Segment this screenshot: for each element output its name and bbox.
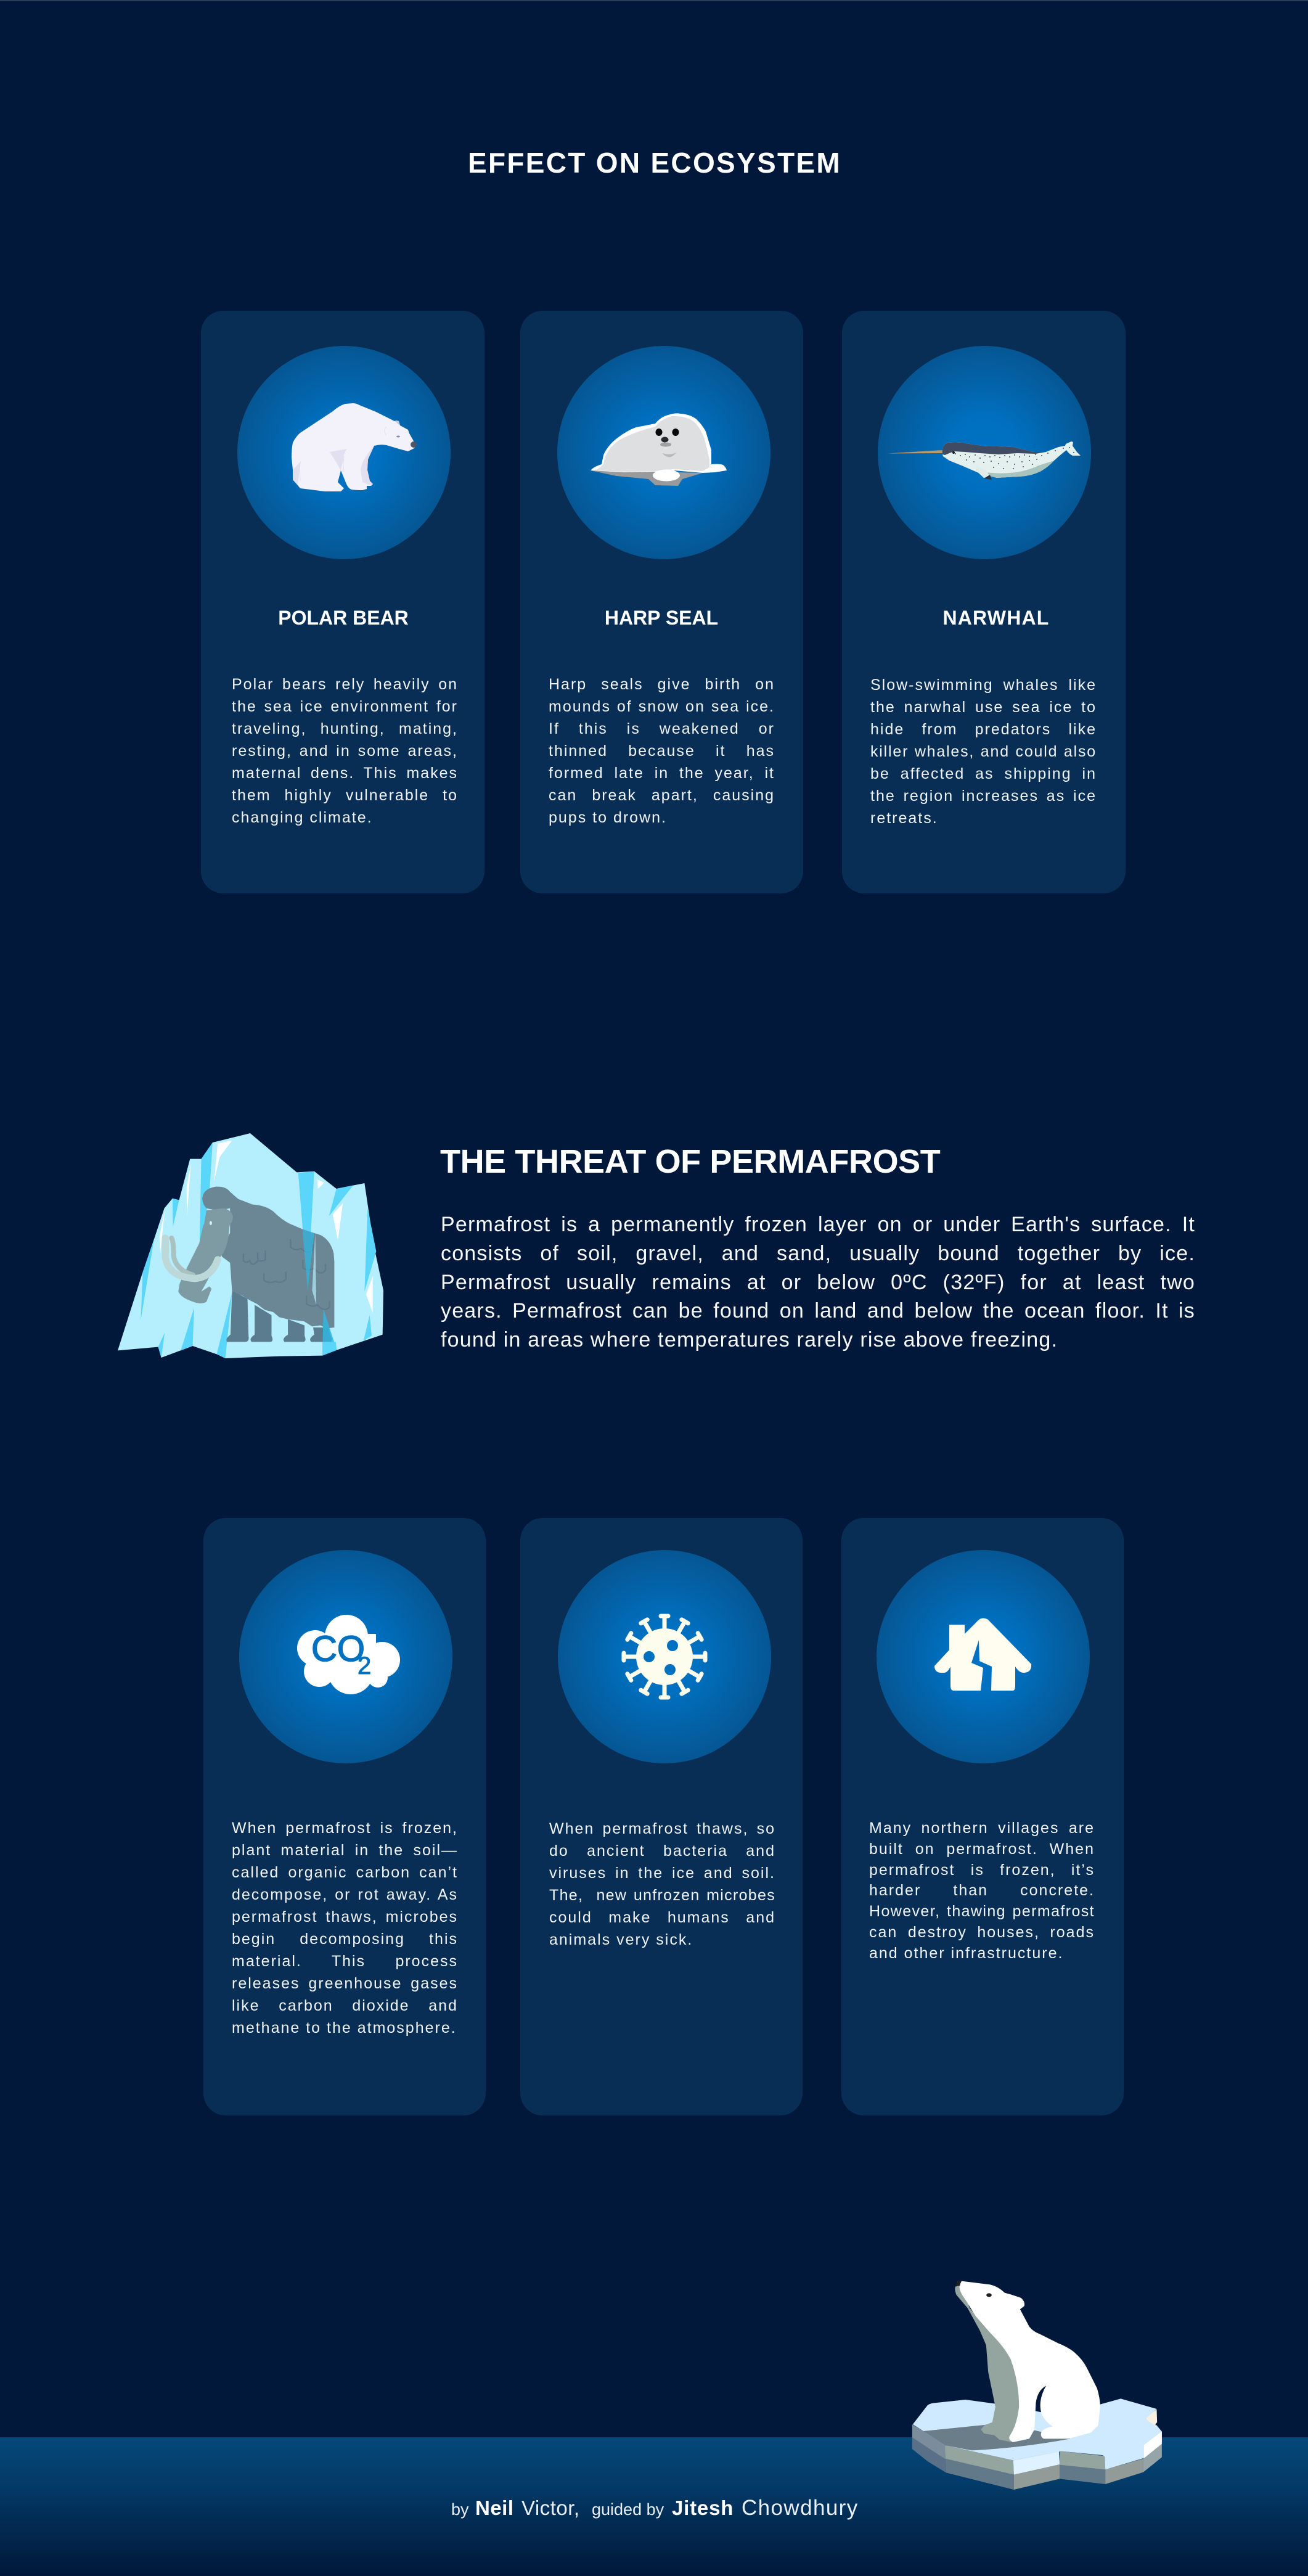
text: polar bear: resting, and in some areas,	[232, 742, 458, 760]
icon circle: polar bear	[237, 346, 451, 559]
text: carbon release: plant material in the soil—	[232, 1842, 458, 1859]
text: harp seal: If this is weakened or	[549, 720, 775, 737]
title: EFFECT ON ECOSYSTEM	[468, 147, 841, 179]
text: narwhal: hide from predators like	[870, 721, 1097, 738]
text: narwhal: the narwhal use sea ice to	[870, 699, 1097, 716]
text: narwhal: killer whales, and could also	[870, 743, 1097, 760]
text: harp seal: Harp seals give birth on	[549, 676, 775, 693]
text: narwhal: be affected as shipping in	[870, 765, 1097, 782]
mammoth trunk	[178, 1224, 230, 1303]
fur marks	[243, 1239, 330, 1310]
text: permafrost description: years. Permafrost can be found on land and below the ocean floor. It is	[441, 1299, 1195, 1323]
mammoth legs	[226, 1290, 332, 1342]
icon circle: CO2 cloud	[239, 1550, 452, 1763]
text: infrastructure damage: can destroy houses, roads	[869, 1924, 1095, 1941]
text: infrastructure damage	[869, 1819, 1095, 1962]
mammoth head	[199, 1208, 233, 1258]
text: carbon release: releases greenhouse gases	[232, 1975, 458, 1992]
text: polar bear: maternal dens. This makes	[232, 765, 458, 782]
icon circle: CO2 cloud: 2	[358, 1652, 371, 1680]
text: harp seal: thinned because it has	[549, 742, 775, 760]
text: narwhal: the region increases as ice	[870, 787, 1097, 805]
panel: harp seal	[520, 311, 803, 893]
text: carbon release: called organic carbon can’t	[232, 1864, 458, 1881]
text: polar bear: the sea ice environment for	[232, 698, 458, 715]
illustration: polar bear on ice floe	[912, 2280, 1162, 2490]
panel: carbon release	[203, 1518, 486, 2115]
text: permafrost description: found in areas where temperatures rarely rise above freezing.	[441, 1328, 1058, 1352]
text: carbon release: decompose, or rot away. As	[232, 1886, 458, 1903]
text: harp seal: formed late in the year, it	[549, 765, 775, 782]
text: carbon release: methane to the atmosphere.	[232, 2019, 457, 2037]
text: polar bear	[232, 676, 458, 826]
mammoth body	[202, 1187, 334, 1329]
text: permafrost description	[441, 1213, 1195, 1352]
text: polar bear: changing climate.	[232, 809, 373, 826]
text: infrastructure damage: and other infrastructure.	[869, 1945, 1063, 1962]
text: harp seal: mounds of snow on sea ice.	[549, 698, 775, 715]
text: polar bear: Polar bears rely heavily on	[232, 676, 458, 693]
bear nose and eye	[955, 2281, 961, 2287]
text: ancient microbes: The, new unfrozen microbes	[549, 1887, 775, 1904]
heading: polar bear: POLAR BEAR	[278, 607, 409, 629]
icon circle: harp seal	[557, 346, 770, 559]
icon circle: narwhal	[878, 346, 1091, 559]
text: infrastructure damage: built on permafrost. When	[869, 1840, 1095, 1858]
bear body	[959, 2281, 1100, 2442]
footer credits: Neil	[475, 2496, 514, 2519]
text: narwhal: retreats.	[870, 810, 938, 827]
footer water band	[0, 2437, 1308, 2576]
heading: harp seal: HARP SEAL	[605, 607, 718, 629]
text: permafrost description: Permafrost is a permanently frozen layer on or under Earth's surface. It	[441, 1213, 1195, 1236]
text: ancient microbes	[549, 1820, 775, 1948]
text: carbon release: material. This process	[232, 1953, 458, 1970]
text: permafrost description: consists of soil, gravel, and sand, usually bound together by ice.	[441, 1242, 1195, 1265]
text: infrastructure damage: However, thawing permafrost	[869, 1903, 1095, 1920]
footer credits	[451, 2496, 859, 2520]
footer credits: Chowdhury	[742, 2496, 859, 2520]
text: harp seal	[549, 676, 775, 826]
icon circle: cracked house	[877, 1550, 1090, 1763]
text: infrastructure damage: Many northern villages are	[869, 1819, 1095, 1837]
icon circle: CO2 cloud: CO	[311, 1629, 365, 1669]
icon circle: virus	[558, 1550, 771, 1763]
text: permafrost description: Permafrost usually remains at or below 0ºC (32ºF) for at least two	[441, 1271, 1195, 1294]
heading: narwhal: NARWHAL	[942, 607, 1050, 629]
text: narwhal	[870, 676, 1097, 827]
text: carbon release: like carbon dioxide and	[232, 1997, 458, 2014]
panel: narwhal	[842, 311, 1126, 893]
text: ancient microbes: viruses in the ice and soil.	[549, 1864, 775, 1882]
footer credits: Jitesh	[672, 2496, 734, 2519]
text: polar bear: them highly vulnerable to	[232, 787, 458, 804]
text: infrastructure damage: permafrost is frozen, it’s	[869, 1861, 1095, 1879]
text: ancient microbes: do ancient bacteria and	[549, 1842, 775, 1860]
mammoth tusks	[165, 1238, 218, 1279]
text: polar bear: traveling, hunting, mating,	[232, 720, 458, 737]
ice floe	[912, 2398, 1162, 2490]
text: carbon release: begin decomposing this	[232, 1930, 458, 1948]
text: ancient microbes: animals very sick.	[549, 1931, 693, 1948]
heading: the threat of permafrost: THE THREAT OF PERMAFROST	[440, 1143, 940, 1180]
text: carbon release: When permafrost is frozen,	[232, 1819, 458, 1837]
text: narwhal: Slow-swimming whales like	[870, 676, 1097, 694]
footer credits: guided by	[592, 2500, 664, 2519]
panel: ancient microbes	[520, 1518, 803, 2115]
text: carbon release: permafrost thaws, microbes	[232, 1908, 458, 1926]
text: harp seal: can break apart, causing	[549, 787, 775, 804]
footer credits: by	[451, 2500, 469, 2519]
panel: infrastructure damage	[841, 1518, 1124, 2115]
illustration: mammoth frozen in ice	[118, 1133, 383, 1358]
panel: polar bear	[201, 311, 484, 893]
text: ancient microbes: could make humans and	[549, 1909, 775, 1926]
text: carbon release	[232, 1819, 458, 2037]
footer credits: Victor,	[521, 2496, 580, 2519]
text: infrastructure damage: harder than concrete.	[869, 1882, 1095, 1899]
bear shadow chest	[955, 2282, 1020, 2442]
text: ancient microbes: When permafrost thaws, so	[549, 1820, 775, 1837]
text: harp seal: pups to drown.	[549, 809, 667, 826]
ice overlay streaks	[303, 1230, 337, 1356]
